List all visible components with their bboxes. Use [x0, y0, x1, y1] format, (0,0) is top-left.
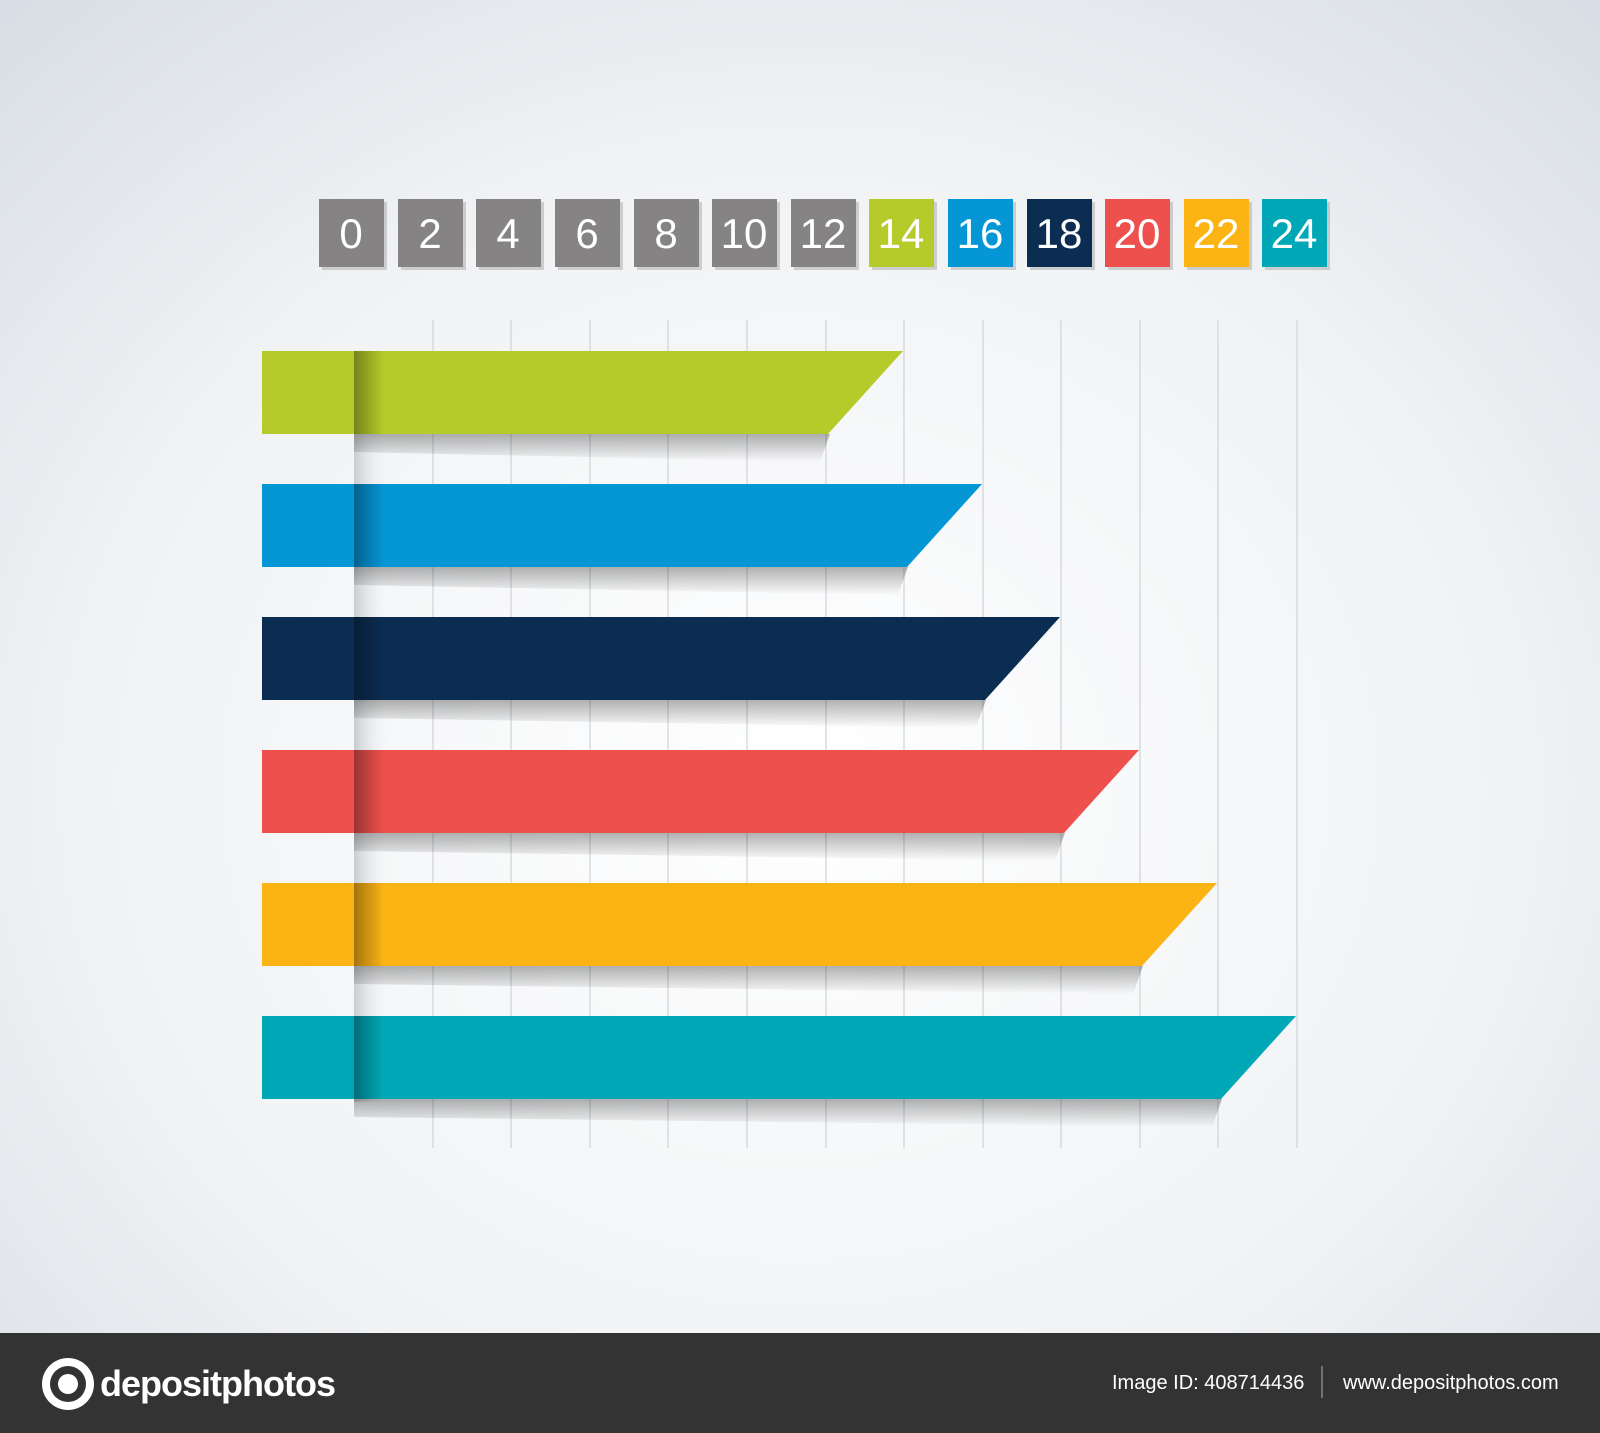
axis labels: 0	[339, 210, 363, 257]
footer bar	[0, 1333, 1600, 1433]
axis labels: 16	[957, 210, 1003, 257]
bar: 22 yellow	[262, 883, 1217, 994]
chart	[262, 320, 1297, 1148]
website: www.depositphotos.com	[1342, 1372, 1559, 1394]
logo	[42, 1358, 335, 1410]
axis labels: 22	[1193, 210, 1239, 257]
bar: 24 teal	[262, 1016, 1296, 1127]
bar: 14 green	[262, 351, 903, 462]
bar: 20 red	[262, 750, 1139, 861]
grid lines	[433, 320, 1297, 1148]
bar: 16 blue	[262, 484, 982, 595]
bar: 18 navy	[262, 617, 1060, 728]
logo: depositphotos	[100, 1363, 335, 1404]
axis labels: 8	[654, 210, 678, 257]
axis labels: 6	[575, 210, 599, 257]
axis labels: 10	[721, 210, 767, 257]
axis labels: 4	[496, 210, 520, 257]
axis labels: 12	[800, 210, 846, 257]
axis labels: 24	[1271, 210, 1317, 257]
image id: Image ID: 408714436	[1112, 1372, 1304, 1394]
wall shading	[354, 434, 394, 1102]
axis labels	[319, 199, 1330, 270]
axis labels: 2	[418, 210, 442, 257]
axis labels: 20	[1114, 210, 1160, 257]
axis labels: 14	[878, 210, 924, 257]
axis labels: 18	[1036, 210, 1082, 257]
